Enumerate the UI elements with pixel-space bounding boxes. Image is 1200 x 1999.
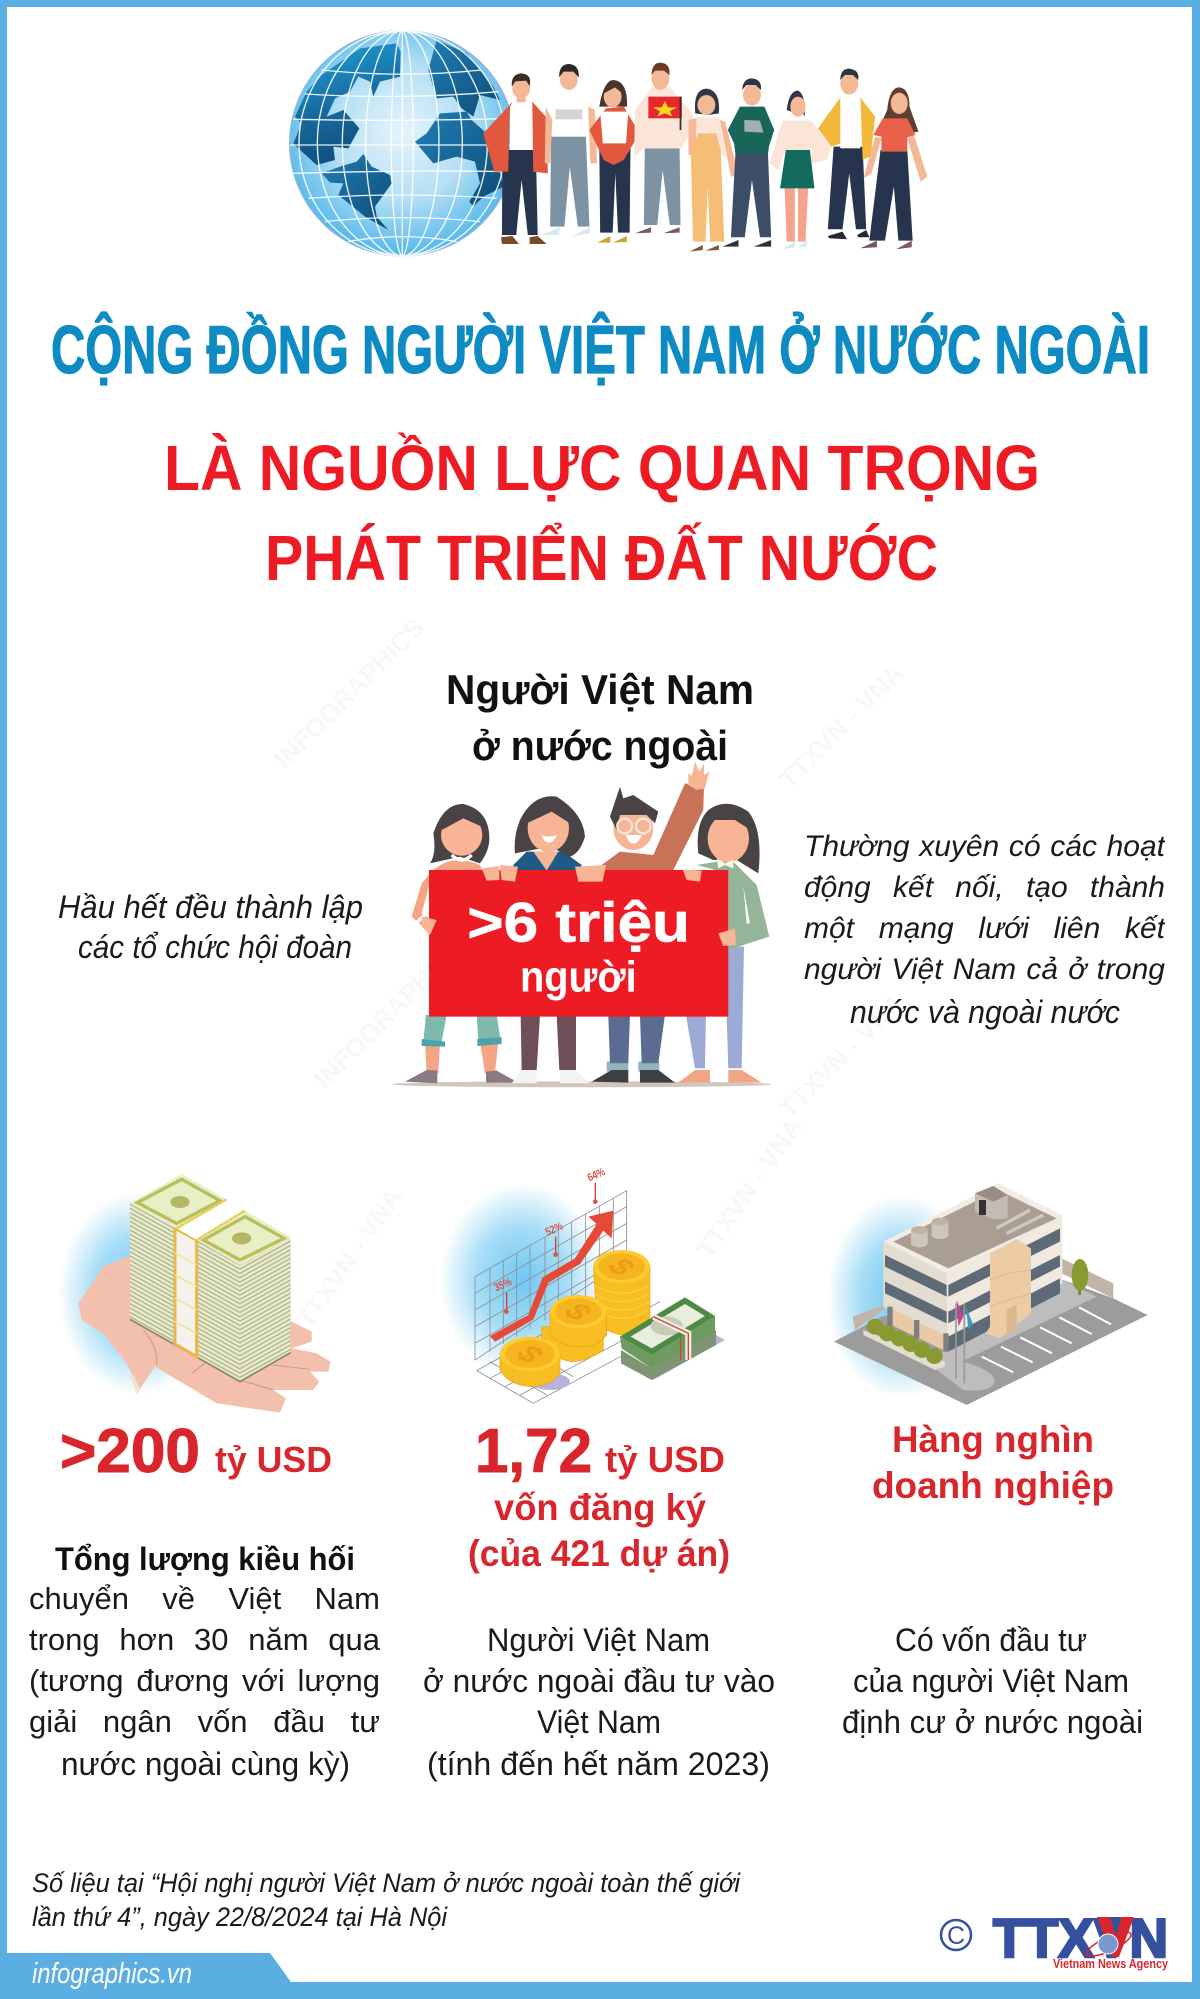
- text block: associations: Hầu hết đều thành lập: [58, 889, 363, 925]
- stat: remittances: [60, 1417, 332, 1486]
- text block: remittances: (tương đương với lượng: [29, 1663, 380, 1698]
- title: red heading: PHÁT TRIỂN ĐẤT NƯỚC: [265, 521, 938, 594]
- office block: [883, 1242, 947, 1343]
- watermarks: TTXVN - VNA: [690, 1112, 809, 1263]
- coin stacks: [500, 1250, 650, 1390]
- text block: remittances: nước ngoài cùng kỳ): [61, 1746, 350, 1782]
- woman 1: [405, 804, 518, 1083]
- text block: enterprises: Có vốn đầu tư: [895, 1622, 1087, 1658]
- cash stacks: [620, 1297, 725, 1380]
- icon: globe: [290, 31, 515, 256]
- money stack: [130, 1174, 291, 1383]
- watermarks: INFOGRAPHICS: [268, 612, 430, 774]
- text block: remittances: [29, 1541, 380, 1782]
- heading: Vietnamese abroad: [446, 666, 754, 769]
- text block: connection activities: động kết nối, tạo thành: [804, 871, 1165, 904]
- illustration: office building: [827, 1183, 1148, 1405]
- illustration: four people with sign: [392, 762, 772, 1087]
- title: red heading: LÀ NGUỒN LỰC QUAN TRỌNG: [164, 432, 1040, 504]
- stat: thousands of enterprises: doanh nghiệp: [872, 1465, 1114, 1506]
- icon: Vietnam flag: [648, 97, 682, 130]
- source note: Số liệu tại “Hội nghị người Việt Nam ở nước ngoài toàn thế giới: [32, 1868, 741, 1898]
- logo: TTXVN: C: [947, 1922, 965, 1950]
- stat: thousands of enterprises: Hàng nghìn: [892, 1419, 1094, 1460]
- watermarks: [268, 612, 910, 1333]
- sign: over 6 million: người: [520, 953, 637, 1002]
- person 3: [589, 80, 639, 243]
- heading: Vietnamese abroad: Người Việt Nam: [446, 666, 754, 713]
- logo: TTXVN: Vietnam News Agency: [1053, 1957, 1168, 1971]
- text block: investment: ở nước ngoài đầu tư vào: [423, 1663, 775, 1699]
- person 5: [689, 89, 739, 252]
- coin stacks: $: [599, 1254, 643, 1280]
- man with glasses waving: [592, 762, 709, 1083]
- illustration: chart, coins and cash: [440, 1166, 725, 1403]
- people group: [483, 63, 927, 252]
- text block: enterprises: [842, 1622, 1143, 1740]
- text block: investment: (tính đến hết năm 2023): [427, 1746, 770, 1782]
- person 2: [541, 64, 597, 237]
- stat: remittances: >200: [60, 1417, 200, 1486]
- text block: connection activities: người Việt Nam cả ở trong: [804, 953, 1165, 986]
- flags: [957, 1300, 963, 1327]
- tree: [1078, 1287, 1081, 1295]
- text block: investment: Người Việt Nam: [487, 1622, 710, 1658]
- logo: TTXVN: TTXVN: [993, 1907, 1168, 1969]
- person 1: [483, 73, 548, 244]
- text block: enterprises: của người Việt Nam: [853, 1663, 1129, 1699]
- percent labels: 35%: [492, 1276, 514, 1295]
- heading: Vietnamese abroad: ở nước ngoài: [472, 722, 728, 769]
- stat: registered capital: [468, 1417, 730, 1574]
- stat: registered capital: 1,72: [475, 1417, 592, 1486]
- stat: remittances: tỷ USD: [215, 1439, 332, 1480]
- person 7: [770, 91, 831, 249]
- text block: connection activities: một mạng lưới liên kết: [804, 912, 1165, 945]
- arrow: rising trend: [490, 1211, 613, 1342]
- text block: associations: các tổ chức hội đoàn: [78, 929, 352, 965]
- title: red heading: [164, 432, 1040, 594]
- sign: over 6 million: [422, 865, 736, 1017]
- sign: over 6 million: >6 triệu: [467, 891, 690, 954]
- text block: remittances: trong hơn 30 năm qua: [29, 1622, 380, 1657]
- source note: lần thứ 4”, ngày 22/8/2024 tại Hà Nội: [32, 1902, 448, 1932]
- text block: associations: [58, 889, 363, 965]
- source note: [32, 1868, 741, 1932]
- grid: [475, 1191, 673, 1403]
- person 4 with flag: [634, 63, 695, 233]
- watermarks: TTXVN - VNA: [773, 657, 910, 794]
- watermarks: TTXVN - VNA: [290, 1182, 409, 1333]
- text block: connection activities: Thường xuyên có các hoạt: [804, 830, 1165, 863]
- illustration: globe and people: [290, 31, 927, 256]
- text block: connection activities: nước và ngoài nước: [850, 994, 1120, 1030]
- illustration: money in hand: [58, 1174, 331, 1413]
- percent labels: 52%: [544, 1221, 565, 1239]
- text block: connection activities: [804, 826, 1165, 1030]
- percent labels: [492, 1166, 607, 1314]
- stat: registered capital: vốn đăng ký: [494, 1487, 706, 1528]
- watermarks: INFOGRAPHICS: [308, 932, 470, 1094]
- planter and bushes: [863, 1330, 945, 1370]
- coin stacks: $: [556, 1299, 600, 1325]
- parking lot: [834, 1280, 1148, 1405]
- stat: thousands of enterprises: [872, 1419, 1114, 1506]
- woman 4: [678, 804, 769, 1083]
- person 6: [722, 78, 774, 247]
- text block: investment: Việt Nam: [537, 1704, 661, 1740]
- percent labels: 64%: [586, 1166, 607, 1185]
- footer site name: infographics.vn: [32, 1958, 192, 1990]
- hand: [78, 1255, 331, 1413]
- text block: remittances: giải ngân vốn đầu tư: [29, 1704, 380, 1739]
- woman 2: [512, 796, 590, 1083]
- text block: remittances: Tổng lượng kiều hối: [55, 1541, 355, 1577]
- person 9: [860, 87, 927, 249]
- text block: investment: [423, 1622, 775, 1782]
- stat: registered capital: tỷ USD: [605, 1439, 725, 1480]
- watermarks: TTXVN - VNA: [773, 987, 910, 1124]
- stat: registered capital: (của 421 dự án): [468, 1533, 730, 1574]
- text block: enterprises: định cư ở nước ngoài: [842, 1704, 1143, 1740]
- text block: remittances: chuyển về Việt Nam: [29, 1581, 380, 1616]
- coin stacks: $: [507, 1341, 552, 1367]
- person 8: [818, 69, 875, 239]
